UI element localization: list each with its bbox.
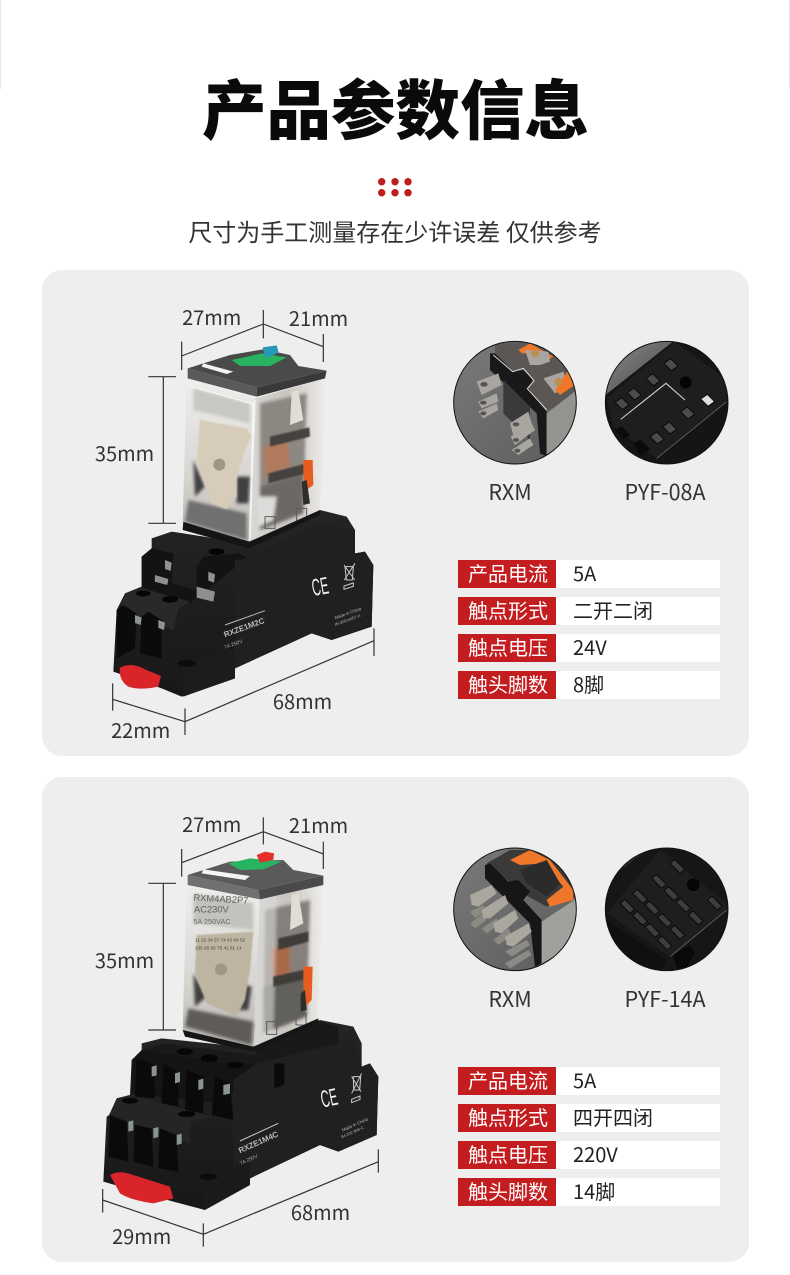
spec table: 触点电压 xyxy=(468,632,548,661)
circle captions xyxy=(488,983,706,1014)
spec table: 触点形式 xyxy=(468,1102,548,1131)
product photo: relay with 14-pin base: RXZE1M4C xyxy=(237,1130,280,1155)
product photo: relay with 14-pin base: RXM4AB2P7 xyxy=(193,893,249,906)
spec table: 产品电流 xyxy=(468,558,548,587)
dimension labels xyxy=(95,302,348,744)
spec table: 8脚 xyxy=(573,669,604,698)
spec table: 触头脚数 xyxy=(468,1176,548,1205)
product photo: relay with 14-pin base: CE xyxy=(318,1084,340,1114)
spec table: 触点电压 xyxy=(468,1139,548,1168)
subtitle: 尺寸为手工测量存在少许误差 仅供参考 xyxy=(188,213,602,248)
spec table: 二开二闭 xyxy=(573,595,653,624)
dimension labels: 29mm xyxy=(112,1221,171,1250)
circle captions: PYF-14A xyxy=(624,983,706,1014)
product photo: relay with 8-pin base: 7A 250V xyxy=(224,639,244,651)
circle: RXM pins xyxy=(454,342,576,464)
red dots xyxy=(378,178,412,196)
panel: two-contact relay xyxy=(42,270,749,756)
product photo: relay with 8-pin base: IN-32014457-X xyxy=(334,613,361,627)
dimension labels: 68mm xyxy=(291,1197,350,1226)
product photo: relay with 14-pin base: 7A 250V xyxy=(239,1153,259,1167)
circle captions xyxy=(488,476,706,507)
spec table: 220V xyxy=(573,1139,618,1168)
circle captions: RXM xyxy=(488,983,532,1014)
top frame edge xyxy=(0,0,790,89)
spec table: 5A xyxy=(573,558,597,587)
detail circles xyxy=(450,843,730,977)
dimension labels: 27mm xyxy=(182,809,241,838)
product photo: relay with 14-pin base: 84-202 M4I-C xyxy=(340,1125,365,1139)
dimension labels: 35mm xyxy=(95,438,154,467)
product photo: relay with 8-pin base: Made in China xyxy=(334,606,362,620)
dimension lines xyxy=(113,310,374,735)
product photo: relay with 14-pin base: Made in China xyxy=(341,1116,369,1133)
product photo: relay with 8-pin base: CE xyxy=(310,573,331,602)
dimension lines xyxy=(103,817,378,1247)
spec table: 5A xyxy=(573,1065,597,1094)
title: 产品参数信息 xyxy=(202,59,589,153)
dimension labels: 35mm xyxy=(95,945,154,974)
circle captions: PYF-08A xyxy=(624,476,706,507)
product photo: relay with 14-pin base: 11 22 34 37 74 42 64 52 xyxy=(195,938,246,943)
product photo: relay with 8-pin base: RXZE1M2C xyxy=(223,616,266,639)
panel: four-contact relay xyxy=(42,777,749,1262)
spec table: 14脚 xyxy=(573,1176,615,1205)
detail circles xyxy=(450,337,730,470)
spec table: 四开四闭 xyxy=(573,1102,653,1131)
spec table: 24V xyxy=(573,632,607,661)
product photo: relay with 14-pin base: 105 95 05 75 41 81 14 xyxy=(195,945,242,950)
product photo: relay with 8-pin base xyxy=(113,310,374,735)
dimension labels: 21mm xyxy=(289,810,348,839)
dimension labels: 68mm xyxy=(273,686,332,715)
circle: PYF-08A socket xyxy=(606,342,728,464)
spec table: 触点形式 xyxy=(468,595,548,624)
product photo: relay with 14-pin base: AC230V xyxy=(194,904,230,914)
spec table xyxy=(458,558,720,699)
spec table xyxy=(458,1065,720,1206)
spec table: 触头脚数 xyxy=(468,669,548,698)
circle captions: RXM xyxy=(488,476,532,507)
circle: RXM pins xyxy=(454,848,576,970)
dimension labels: 27mm xyxy=(182,302,241,331)
spec table: 产品电流 xyxy=(468,1065,548,1094)
circle: PYF-14A socket xyxy=(606,848,728,970)
product photo: relay with 14-pin base: 5A 250VAC xyxy=(193,917,231,926)
dimension labels xyxy=(95,809,350,1250)
dimension labels: 21mm xyxy=(289,303,348,332)
dimension labels: 22mm xyxy=(111,715,170,744)
product photo: relay with 14-pin base xyxy=(103,817,378,1247)
